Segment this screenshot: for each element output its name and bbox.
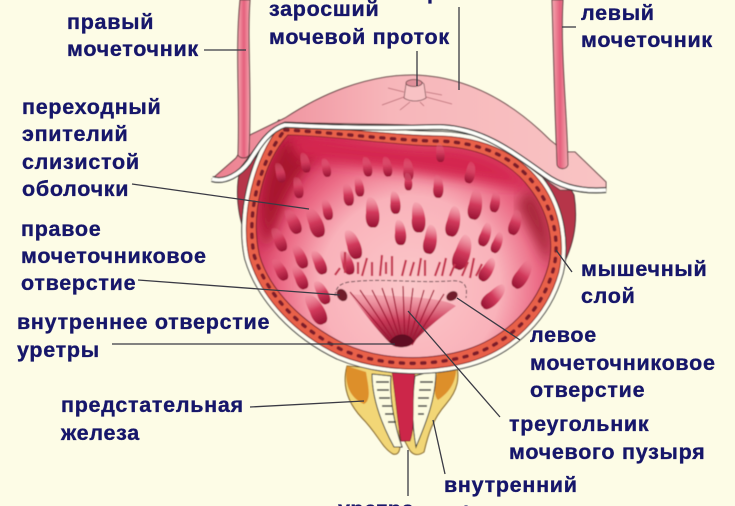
left ureter — [552, 0, 568, 169]
ureteral openings — [334, 287, 350, 303]
muscular wall band — [246, 125, 561, 369]
obliterated urachus stump — [382, 80, 452, 110]
leader lines — [112, 7, 576, 496]
bladder triangle — [334, 280, 466, 347]
muscle dots — [252, 130, 556, 363]
label: right ureteral orifice: отверстие — [21, 271, 136, 295]
label: left ureteral orifice: отверстие — [530, 378, 645, 402]
peritoneum dome and flap — [212, 75, 606, 191]
label: right ureteral orifice: мочеточниковое — [21, 244, 207, 268]
bladder wall and interior — [246, 125, 561, 369]
label: urachus: мочевой проток — [269, 25, 450, 49]
label: transitional epithelium: слизистой — [22, 150, 140, 174]
label: right ureter: мочеточник — [67, 37, 199, 61]
label: transitional epithelium: эпителий — [22, 122, 128, 146]
illustration: bladder anatomy — [212, 0, 606, 455]
label: internal urethral orifice: внутреннее отверстие — [17, 310, 270, 334]
outer white ring — [246, 125, 561, 369]
label: left ureteral orifice: мочеточниковое — [530, 351, 716, 375]
label: prostate: предстательная — [61, 393, 244, 417]
label: left ureter: левый — [581, 1, 655, 25]
label: right ureteral orifice: правое — [21, 217, 101, 241]
urethra — [392, 370, 415, 441]
mucosal folds — [270, 143, 537, 327]
label: transitional epithelium: переходный — [22, 95, 161, 119]
bladder outer body — [237, 120, 576, 330]
label: right ureter: правый — [67, 10, 154, 34]
right ureter — [238, 0, 250, 158]
label: bladder trigone: мочевого пузыря — [509, 440, 705, 464]
label: internal sphincter: внутренний — [444, 473, 578, 497]
label: muscular layer: слой — [581, 284, 636, 308]
white cut edge — [212, 125, 606, 190]
label: prostate: железа — [60, 421, 140, 445]
label: muscular layer: мышечный — [581, 257, 707, 281]
prostate gland — [345, 362, 458, 455]
fine ridges above triangle — [335, 252, 482, 278]
label: bladder trigone: треугольник — [509, 412, 649, 436]
bladder cavity — [256, 135, 551, 358]
label: left ureteral orifice: левое — [530, 323, 597, 347]
label: left ureter: мочеточник — [581, 28, 713, 52]
label: transitional epithelium: оболочки — [22, 177, 129, 201]
label: internal urethral orifice: уретры — [17, 338, 100, 362]
